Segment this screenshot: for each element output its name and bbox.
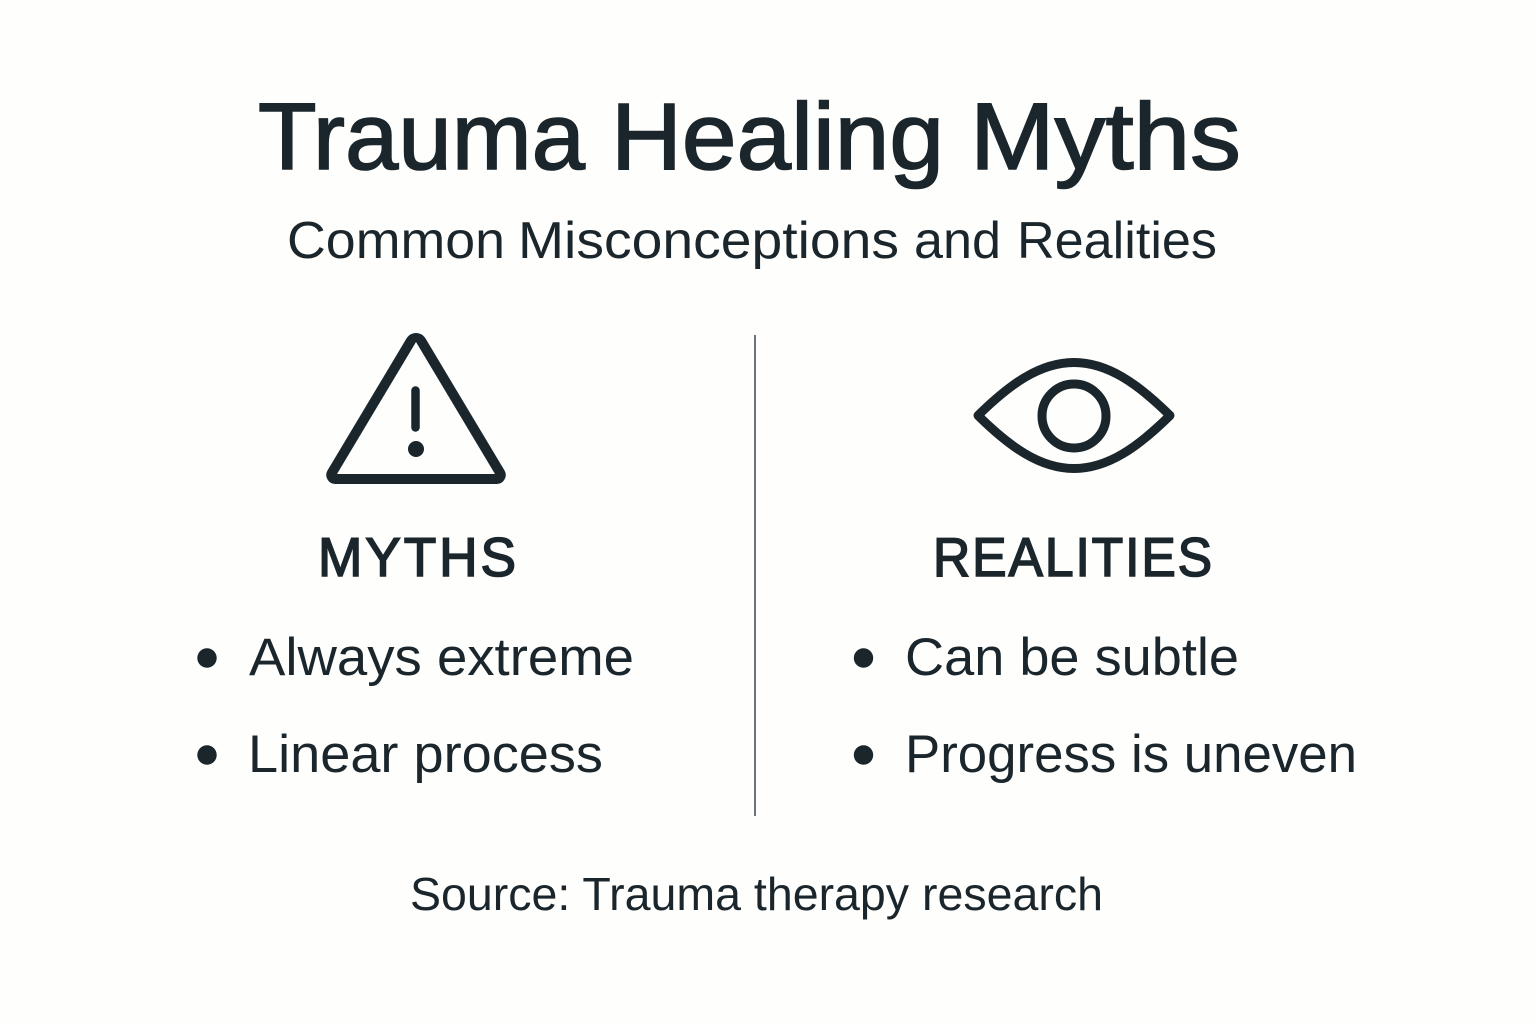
subtitle: Realities: [1017, 212, 1217, 270]
icon: eye: [978, 362, 1170, 468]
heading: myths: MYTHS: [318, 526, 519, 588]
center divider: [754, 335, 756, 816]
icon: warning triangle: [326, 333, 506, 484]
title: Healing: [611, 84, 944, 190]
list: realities: [854, 628, 1357, 784]
bullet item: always extreme: Always extreme: [249, 628, 634, 687]
subtitle: Misconceptions: [518, 212, 899, 270]
source note: Source: Trauma therapy research: [410, 868, 1103, 920]
list: myths: [197, 628, 634, 784]
subtitle: Common: [287, 212, 505, 270]
bullet item: linear process: Linear process: [248, 725, 603, 784]
title: Myths: [970, 84, 1241, 190]
subtitle: and: [914, 212, 1001, 270]
bullet item: can be subtle: Can be subtle: [905, 628, 1239, 687]
title: Trauma: [258, 84, 585, 190]
panel: myths: [197, 333, 634, 784]
heading: realities: REALITIES: [933, 526, 1214, 588]
bullet item: progress is uneven: Progress is uneven: [905, 725, 1357, 784]
panel: realities: [854, 362, 1357, 784]
